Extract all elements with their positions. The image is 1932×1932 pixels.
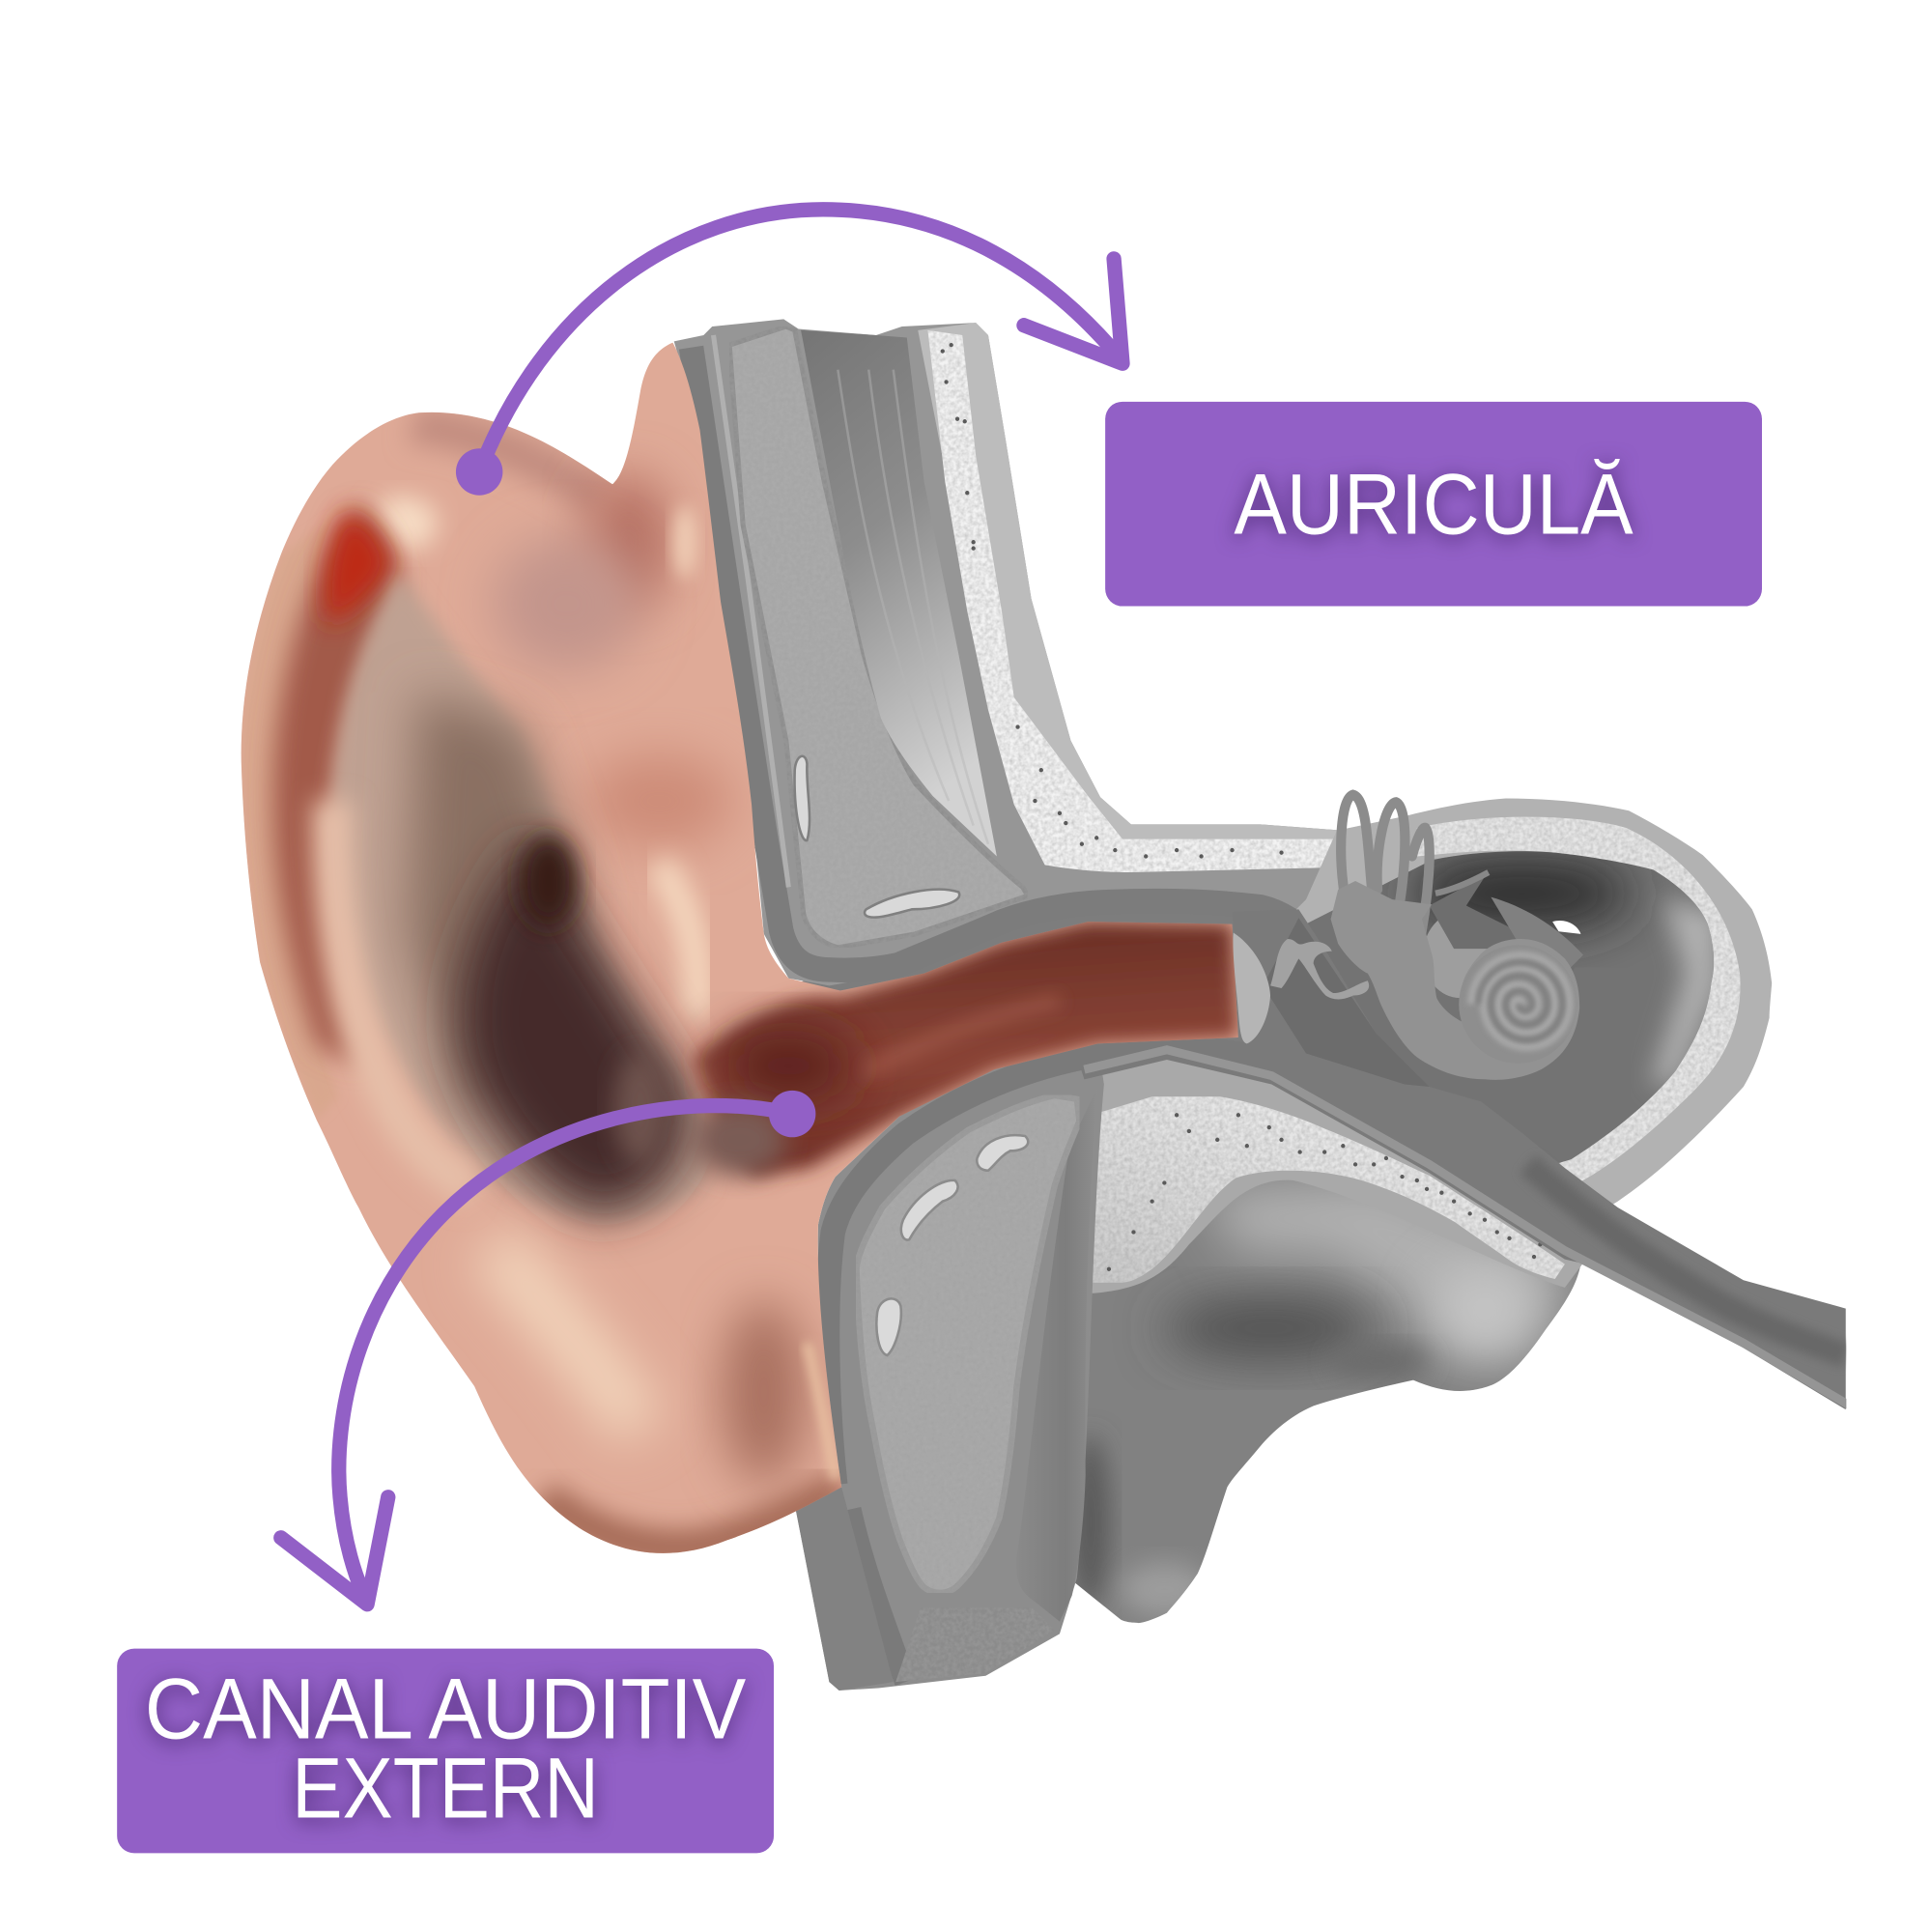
top edge muted shade — [406, 412, 610, 510]
arrow: auricle pointer — [456, 210, 1122, 496]
outer rim tone — [242, 541, 330, 1117]
pink lower shade — [585, 754, 733, 848]
antitragus lit strip — [332, 801, 474, 1189]
bottom cut surface — [895, 1608, 1055, 1682]
lining band — [692, 348, 1316, 970]
temporal bone underside — [1075, 1180, 1580, 1623]
background organs — [1423, 912, 1497, 998]
concha dark core — [458, 838, 691, 1213]
right bottom lighter concha — [613, 1054, 668, 1164]
skin base — [222, 321, 1282, 1577]
eardrum and ossicles — [1233, 933, 1369, 1043]
red helix fold — [324, 511, 392, 626]
lower shade near bottom of lobe — [542, 1488, 841, 1548]
label: external auditory canal: EXTERN — [292, 1739, 599, 1835]
label: external auditory canal: CANAL AUDITIV — [145, 1661, 747, 1757]
white gap — [1552, 921, 1580, 934]
outer fat-side layer — [918, 323, 1343, 850]
canal entrance grey-brown fade — [693, 1103, 786, 1177]
muscle layer — [801, 330, 997, 856]
label: auricula — [1105, 402, 1762, 607]
upper reddish patch near notch — [585, 474, 671, 610]
lobe highlights — [493, 1244, 640, 1430]
fatty tissue layer — [927, 330, 1333, 872]
outer lining band — [828, 1057, 1084, 1485]
ear canal — [694, 922, 1238, 1177]
flap — [795, 1488, 894, 1690]
bone interior — [856, 1095, 1079, 1593]
skin highlights — [368, 497, 438, 551]
bone layer — [729, 327, 1028, 948]
semicircular canals — [1341, 795, 1430, 955]
concha brown mid-tone — [407, 690, 579, 1109]
lower bone block with sinuses — [795, 1043, 1104, 1690]
lower fat and spongy layer — [1083, 1057, 1583, 1293]
concha interior — [331, 573, 708, 1220]
arrow: ear canal pointer — [281, 1091, 815, 1605]
silhouette — [674, 319, 1343, 985]
canal highlight streak — [867, 1001, 1060, 1072]
ear cross-section illustration — [222, 319, 1861, 1690]
side strip — [1016, 1087, 1097, 1622]
sinus air cells — [876, 1135, 1028, 1355]
label: external auditory canal — [117, 1649, 774, 1853]
canal dark mouth — [721, 1029, 856, 1103]
scapha shading — [272, 505, 398, 1065]
sinuses — [795, 756, 959, 918]
upper section — [674, 319, 1343, 985]
eustachian tube and lining band — [1072, 909, 1861, 1412]
cochlea spiral — [1459, 945, 1577, 1064]
outer ear: pinna and ear canal — [222, 321, 1282, 1577]
inner ear housing with dark cavity — [1296, 798, 1772, 1204]
underlying grey fill — [788, 887, 1589, 1233]
spongy band — [1417, 817, 1741, 1182]
vestibule and basal turn — [1331, 881, 1579, 1080]
label: auricula: AURICULĂ — [1234, 455, 1634, 552]
cavity — [1308, 851, 1714, 1163]
mauve patch — [493, 536, 640, 671]
cochlea, vestibule and semicircular canals — [1331, 795, 1583, 1080]
